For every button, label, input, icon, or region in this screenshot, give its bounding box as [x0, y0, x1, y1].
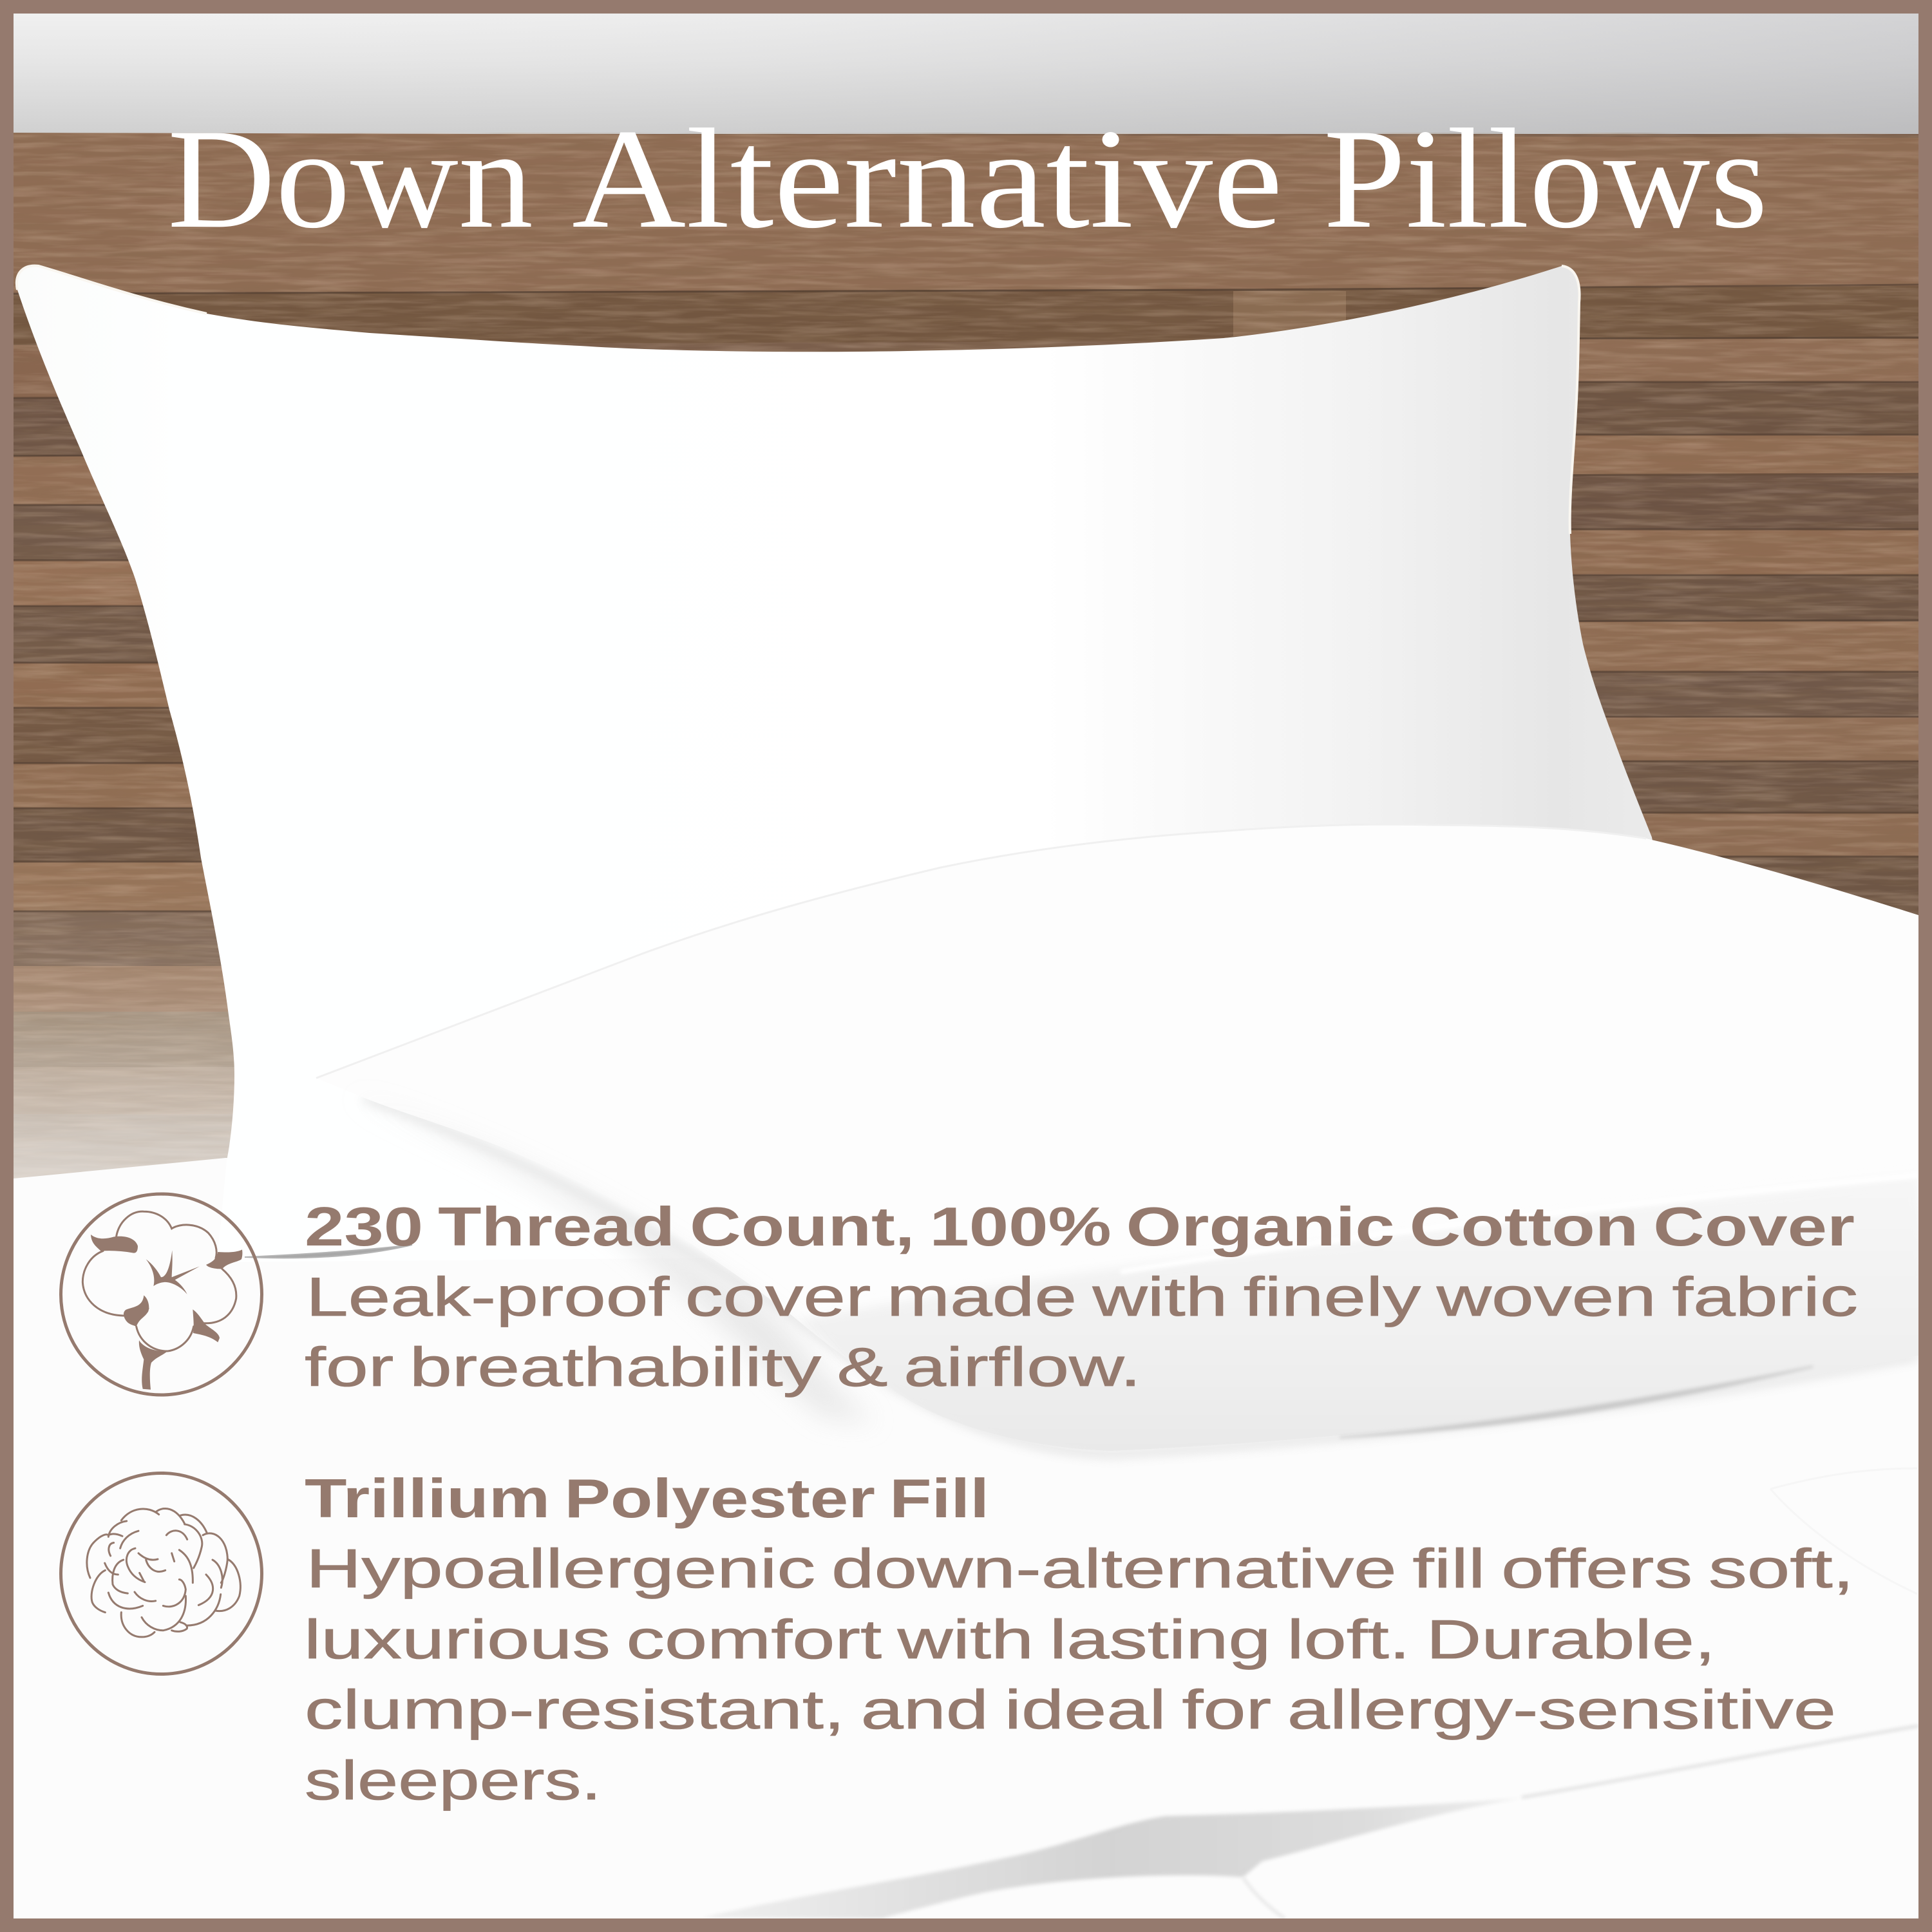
right underside shadow line [1340, 1367, 1813, 1437]
title: Pillows [1323, 100, 1768, 258]
wooden headboard planks [0, 133, 1932, 1185]
text block: cotton cover [305, 1197, 1858, 1398]
front pillow body [316, 824, 1918, 1451]
pillow left seam shading [348, 1095, 876, 1423]
front pillow shadow on bed [365, 1098, 1918, 1454]
body: polyester fill [304, 1539, 1854, 1812]
front pillow gusset [809, 1224, 1918, 1451]
body: cotton cover: for breathability & airflow. [305, 1337, 1141, 1398]
title: Down [167, 100, 533, 258]
body: polyester fill: sleepers. [305, 1750, 601, 1812]
heading: cotton cover: 230 Thread Count, 100% Organic Cotton Cover [305, 1197, 1855, 1258]
body: polyester fill: luxurious comfort with lasting loft. Durable, [304, 1609, 1716, 1671]
body: cotton cover [305, 1267, 1858, 1398]
title [167, 100, 1768, 258]
front pillow crease highlight [1121, 1175, 1918, 1272]
ceiling strip [0, 0, 1932, 137]
body: cotton cover: Leak-proof cover made with finely woven fabric [306, 1267, 1858, 1328]
text block: polyester fill [304, 1468, 1854, 1812]
body: polyester fill: clump-resistant, and ideal for allergy-sensitive [305, 1680, 1836, 1741]
bed crease left [245, 1245, 412, 1258]
heading: polyester fill: Trillium Polyester Fill [305, 1468, 989, 1530]
icon: polyester fill cloud [61, 1473, 261, 1674]
duvet fold and shadow [702, 1468, 1918, 1918]
body: polyester fill: Hypoallergenic down-alternative fill offers soft, [306, 1539, 1854, 1600]
back pillow [17, 266, 1674, 1262]
icon: cotton boll [61, 1194, 261, 1395]
title: Alternative [572, 100, 1283, 258]
bed surface [0, 1158, 1932, 1932]
front pillow [316, 824, 1932, 1462]
